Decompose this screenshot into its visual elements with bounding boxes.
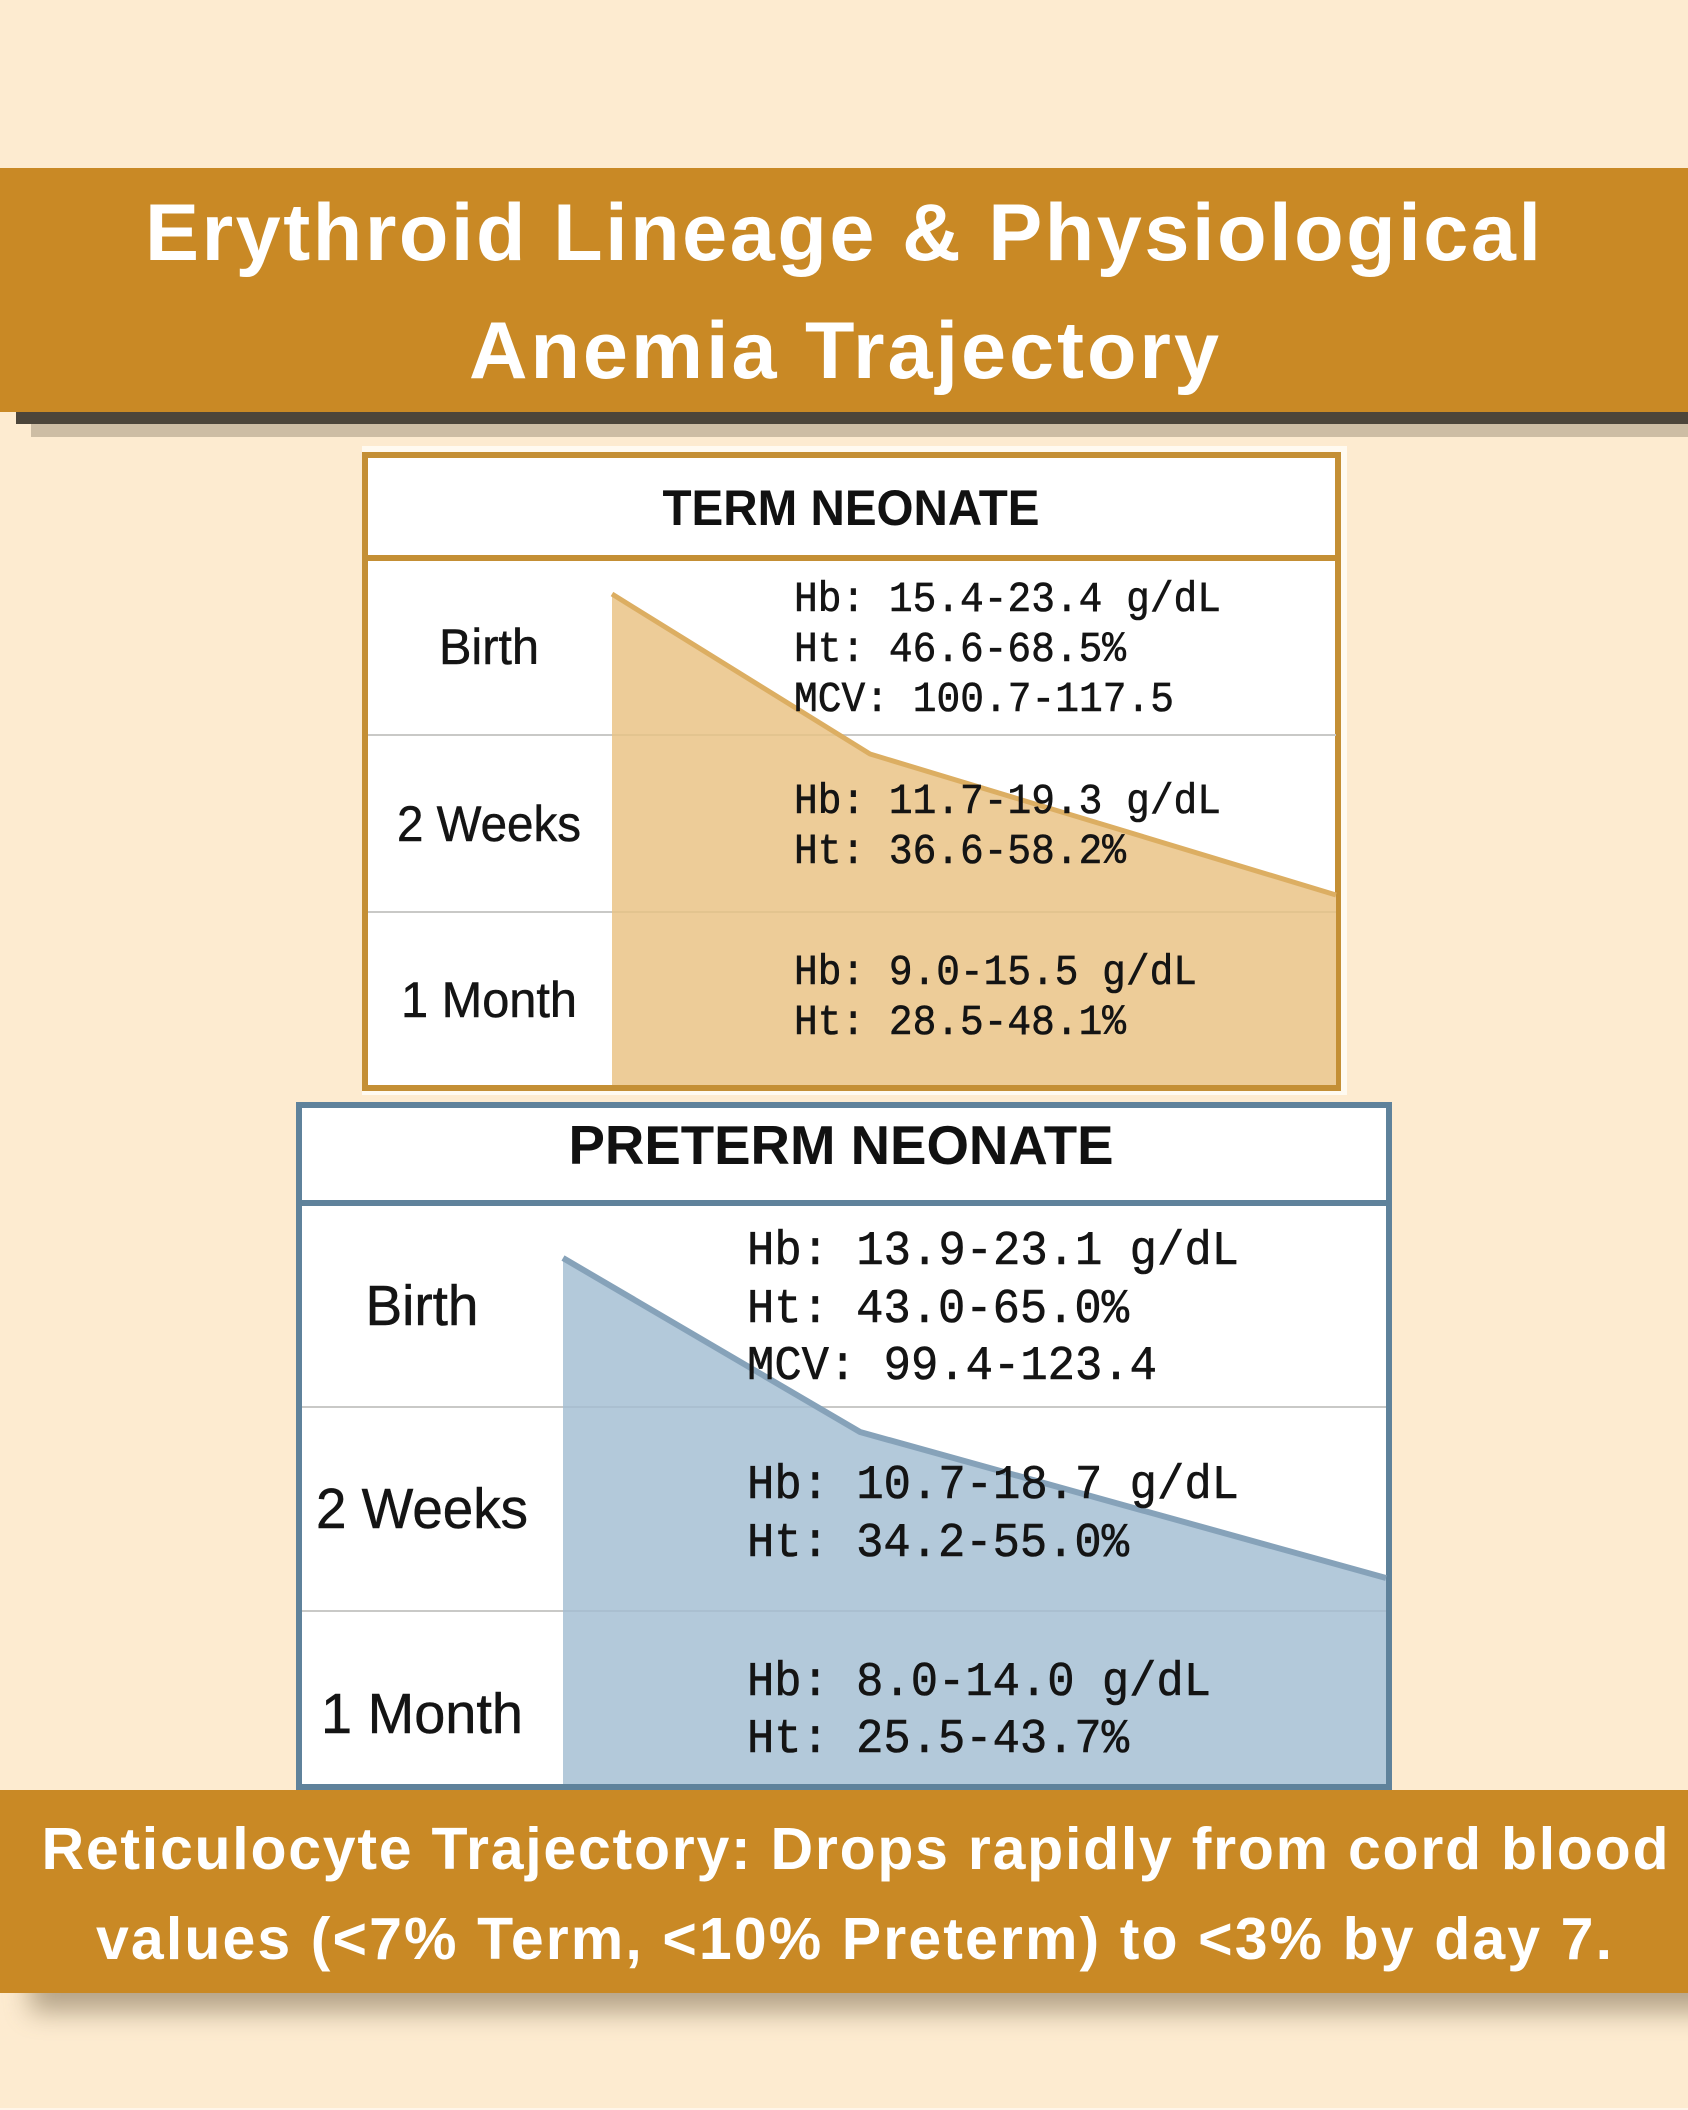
term 2 weeks values: Ht: 36.6-58.2%: [794, 827, 1126, 876]
term row labels: [397, 619, 581, 1028]
term row labels: Birth: [439, 619, 539, 675]
footer text: values (<7% Term, <10% Preterm) to <3% by day 7.: [96, 1906, 1612, 1972]
term area chart: [612, 594, 1336, 1085]
preterm 1 month values: [747, 1655, 1211, 1767]
term row labels: 1 Month: [401, 972, 577, 1028]
title: Anemia Trajectory: [469, 306, 1219, 396]
preterm 1 month values: Ht: 25.5-43.7%: [747, 1712, 1130, 1767]
term birth values: Hb: 15.4-23.4 g/dL: [794, 575, 1221, 624]
footer banner: [0, 1790, 1688, 2012]
term birth values: MCV: 100.7-117.5: [794, 675, 1174, 724]
title: [145, 188, 1541, 396]
term birth values: Ht: 46.6-68.5%: [794, 625, 1126, 674]
preterm 1 month values: Hb: 8.0-14.0 g/dL: [747, 1655, 1211, 1710]
preterm 2 weeks values: [747, 1458, 1239, 1571]
title banner: [0, 168, 1688, 437]
preterm row labels: [316, 1274, 528, 1746]
preterm 2 weeks values: Hb: 10.7-18.7 g/dL: [747, 1458, 1239, 1513]
preterm area chart: [563, 1258, 1386, 1784]
panel: term neonate: [362, 446, 1347, 1095]
term 1 month values: Ht: 28.5-48.1%: [794, 998, 1126, 1047]
preterm row labels: 2 Weeks: [316, 1477, 528, 1541]
preterm row labels: 1 Month: [321, 1682, 523, 1746]
term 1 month values: [794, 948, 1197, 1047]
term 1 month values: Hb: 9.0-15.5 g/dL: [794, 948, 1197, 997]
preterm header: PRETERM NEONATE: [568, 1114, 1114, 1176]
preterm birth values: Ht: 43.0-65.0%: [747, 1282, 1130, 1337]
preterm birth values: MCV: 99.4-123.4: [747, 1339, 1157, 1394]
term birth values: [794, 575, 1221, 724]
title: Erythroid Lineage & Physiological: [145, 188, 1541, 278]
panel: preterm neonate: [299, 1105, 1389, 1787]
preterm birth values: Hb: 13.9-23.1 g/dL: [747, 1224, 1239, 1279]
term header: TERM NEONATE: [662, 480, 1040, 536]
preterm 2 weeks values: Ht: 34.2-55.0%: [747, 1516, 1130, 1571]
preterm row labels: Birth: [366, 1274, 478, 1338]
term 2 weeks values: [794, 777, 1221, 876]
footer text: [42, 1816, 1668, 1972]
term 2 weeks values: Hb: 11.7-19.3 g/dL: [794, 777, 1221, 826]
term row labels: 2 Weeks: [397, 796, 581, 852]
preterm birth values: [747, 1224, 1239, 1394]
footer text: Reticulocyte Trajectory: Drops rapidly from cord blood: [42, 1816, 1668, 1882]
